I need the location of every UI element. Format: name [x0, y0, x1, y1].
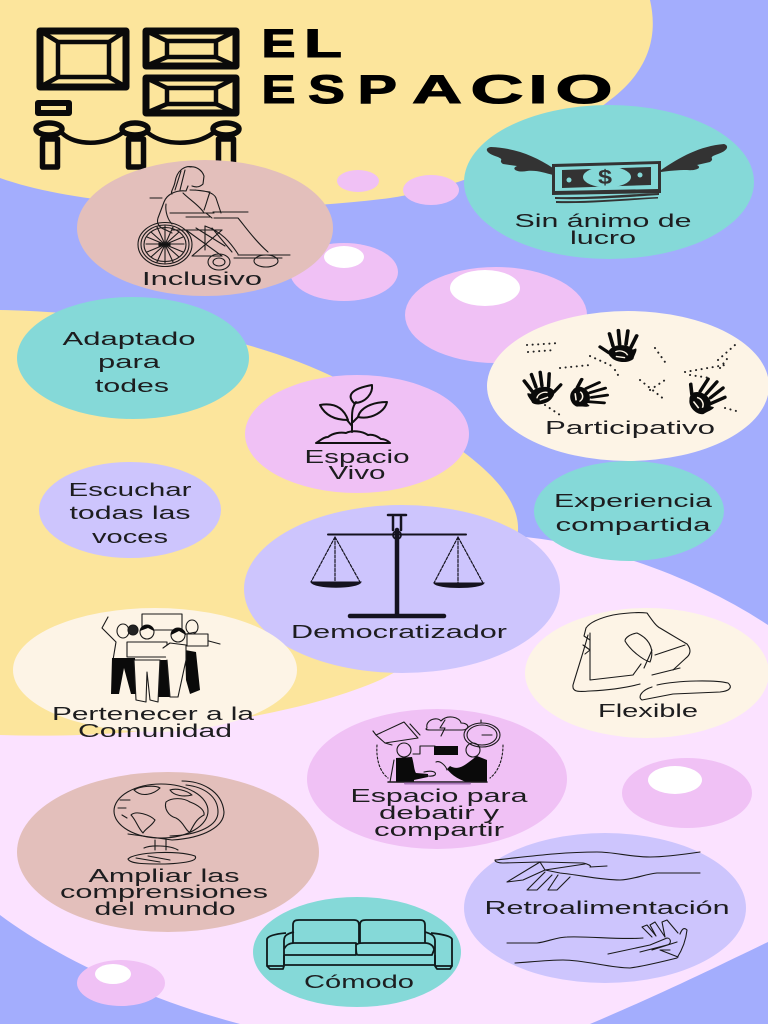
panel: Ampliar las comprensiones del mundo: comprensiones	[60, 882, 268, 902]
icon: yoga figure	[573, 613, 730, 700]
panel: Experiencia compartida	[534, 461, 724, 561]
title: C	[470, 68, 524, 112]
title: E	[262, 22, 296, 66]
panel: Adaptado para todes: para	[98, 352, 162, 372]
panel: Espacio para debatir y compartir: debatir y	[379, 803, 499, 823]
title: I	[528, 68, 548, 112]
title: O	[556, 68, 612, 112]
title: E	[262, 68, 296, 112]
panel: Ampliar las comprensiones del mundo: del mundo	[94, 899, 236, 919]
label: lucro	[570, 228, 636, 248]
label: Inclusivo	[142, 269, 262, 289]
label: Cómodo	[304, 972, 414, 992]
panel: Espacio Vivo	[245, 375, 469, 493]
panel: Adaptado para todes: todes	[95, 376, 169, 396]
title: L	[304, 22, 342, 66]
label: Ampliar las	[88, 866, 240, 886]
panel: Pertenecer a la Comunidad: Comunidad	[78, 721, 232, 741]
panel: Democratizador	[244, 505, 560, 673]
label: Espacio	[304, 447, 410, 467]
icon label: dollar sign: $	[598, 167, 612, 189]
panel: Escuchar todas las voces: todas las	[70, 503, 190, 523]
panel: Escuchar todas las voces: voces	[92, 527, 168, 547]
panel: Experiencia compartida: Experiencia	[554, 491, 714, 511]
icon: crowd with placards	[102, 614, 220, 702]
panel: Espacio para debatir y compartir	[307, 709, 567, 849]
background shape: middle yellow	[0, 310, 518, 736]
title: S	[308, 68, 345, 112]
label: Espacio para	[350, 786, 529, 806]
icon: sprout	[316, 385, 390, 443]
icon: desk globe	[114, 781, 224, 864]
panel: Escuchar todas las voces: Escuchar	[68, 480, 192, 500]
label: Sin ánimo de	[514, 211, 692, 231]
label: Participativo	[545, 418, 715, 438]
icon: two people debating	[373, 717, 503, 784]
panel: Escuchar todas las voces	[39, 462, 221, 558]
panel: Cómodo	[253, 897, 461, 1007]
panel: Pertenecer a la Comunidad	[13, 608, 297, 741]
decorative bubbles	[77, 170, 752, 1006]
panel: Ampliar las comprensiones del mundo	[17, 772, 319, 932]
label: Democratizador	[291, 622, 507, 642]
background shape: top yellow	[0, 0, 653, 208]
panel: Espacio Vivo: Vivo	[328, 463, 386, 483]
title: P	[358, 68, 397, 112]
background shape: pink lower	[0, 535, 768, 1024]
icon: person in wheelchair	[138, 167, 290, 270]
icon: gallery frames and stanchions	[36, 31, 239, 169]
label: Retroalimentación	[484, 898, 730, 918]
icon: handprints	[521, 327, 740, 419]
panel: Retroalimentación	[464, 833, 746, 983]
panel: Experiencia compartida: compartida	[556, 515, 712, 535]
panel: Espacio para debatir y compartir: compartir	[374, 820, 504, 840]
panel: Adaptado para todes: Adaptado	[62, 329, 196, 349]
icon: lower open hand	[507, 920, 687, 968]
label: Flexible	[598, 701, 698, 721]
icon: balance scale	[311, 515, 484, 616]
icon: sofa	[267, 920, 452, 969]
icon: upper reaching hand	[495, 852, 700, 890]
title: A	[412, 68, 462, 112]
panel: Adaptado para todes	[17, 297, 249, 419]
panel: Inclusivo	[77, 160, 333, 296]
label: Pertenecer a la	[52, 704, 256, 724]
panel: Flexible	[525, 608, 768, 738]
panel: Participativo	[487, 311, 768, 461]
icon: winged banknote	[487, 144, 727, 203]
title	[262, 22, 612, 112]
panel: Sin ánimo de lucro	[464, 105, 754, 259]
label	[514, 211, 692, 248]
